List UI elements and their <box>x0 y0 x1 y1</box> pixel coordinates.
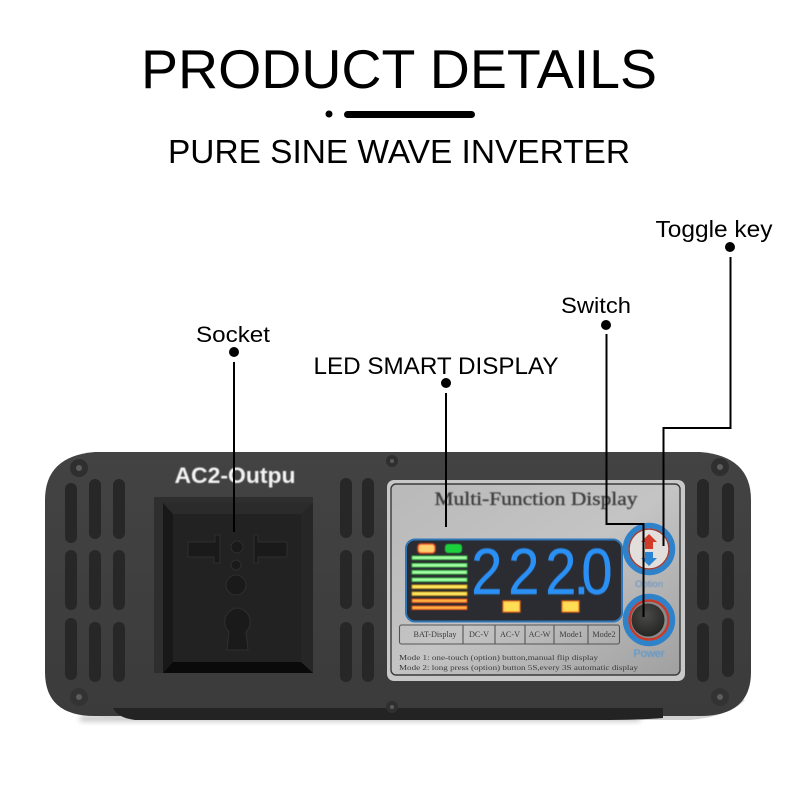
callout: LED smart display: LED SMART DISPLAY <box>314 353 558 380</box>
digital readout: 222.0 <box>471 535 612 608</box>
vent slots: centre <box>340 478 374 682</box>
mode table: AC-W <box>529 630 551 639</box>
title: PRODUCT DETAILS <box>141 38 657 100</box>
product: inverter front panel <box>45 216 773 721</box>
up arrow <box>641 534 657 549</box>
display plate <box>387 480 685 681</box>
battery bars <box>412 556 467 610</box>
base shadow <box>80 716 640 721</box>
power button: Power <box>633 648 665 660</box>
mode table: BAT-Display <box>414 630 457 639</box>
callout: socket: Socket <box>196 322 270 347</box>
vent slots: right <box>697 479 734 682</box>
inverter body <box>45 452 751 716</box>
LED screen <box>406 535 622 622</box>
mode instructions: Mode 2: long press (option) button 5S,every 3S automatic display <box>399 663 638 672</box>
mode table: AC-V <box>500 630 520 639</box>
callout: switch: Switch <box>561 293 631 318</box>
mode table <box>400 625 620 644</box>
socket pin holes <box>188 535 287 650</box>
title divider <box>326 110 475 118</box>
universal socket <box>154 497 313 673</box>
mode table: Mode1 <box>559 630 583 639</box>
callout: socket <box>196 322 270 532</box>
bottom feet strip <box>113 708 663 720</box>
mode indicators <box>503 601 579 612</box>
socket label: AC2-Outpu <box>174 463 296 488</box>
callout: LED smart display <box>314 353 558 527</box>
mode table: Mode2 <box>592 630 616 639</box>
callout: toggle key: Toggle key <box>656 216 773 242</box>
down arrow <box>641 552 657 566</box>
callout: switch <box>561 293 644 617</box>
subtitle: PURE SINE WAVE INVERTER <box>168 134 630 171</box>
status LEDs <box>418 544 462 553</box>
mode instructions <box>399 653 638 672</box>
option button: Option <box>635 579 663 590</box>
screws <box>70 455 729 713</box>
mode table: DC-V <box>469 630 489 639</box>
vent slots: left <box>65 479 125 682</box>
silver bottom edge <box>70 700 745 720</box>
power button <box>626 596 672 660</box>
mode instructions: Mode 1: one-touch (option) button,manual flip display <box>399 653 598 662</box>
option button <box>626 526 672 590</box>
callout: toggle key <box>656 216 773 546</box>
plate title: Multi-Function Display <box>434 490 638 510</box>
